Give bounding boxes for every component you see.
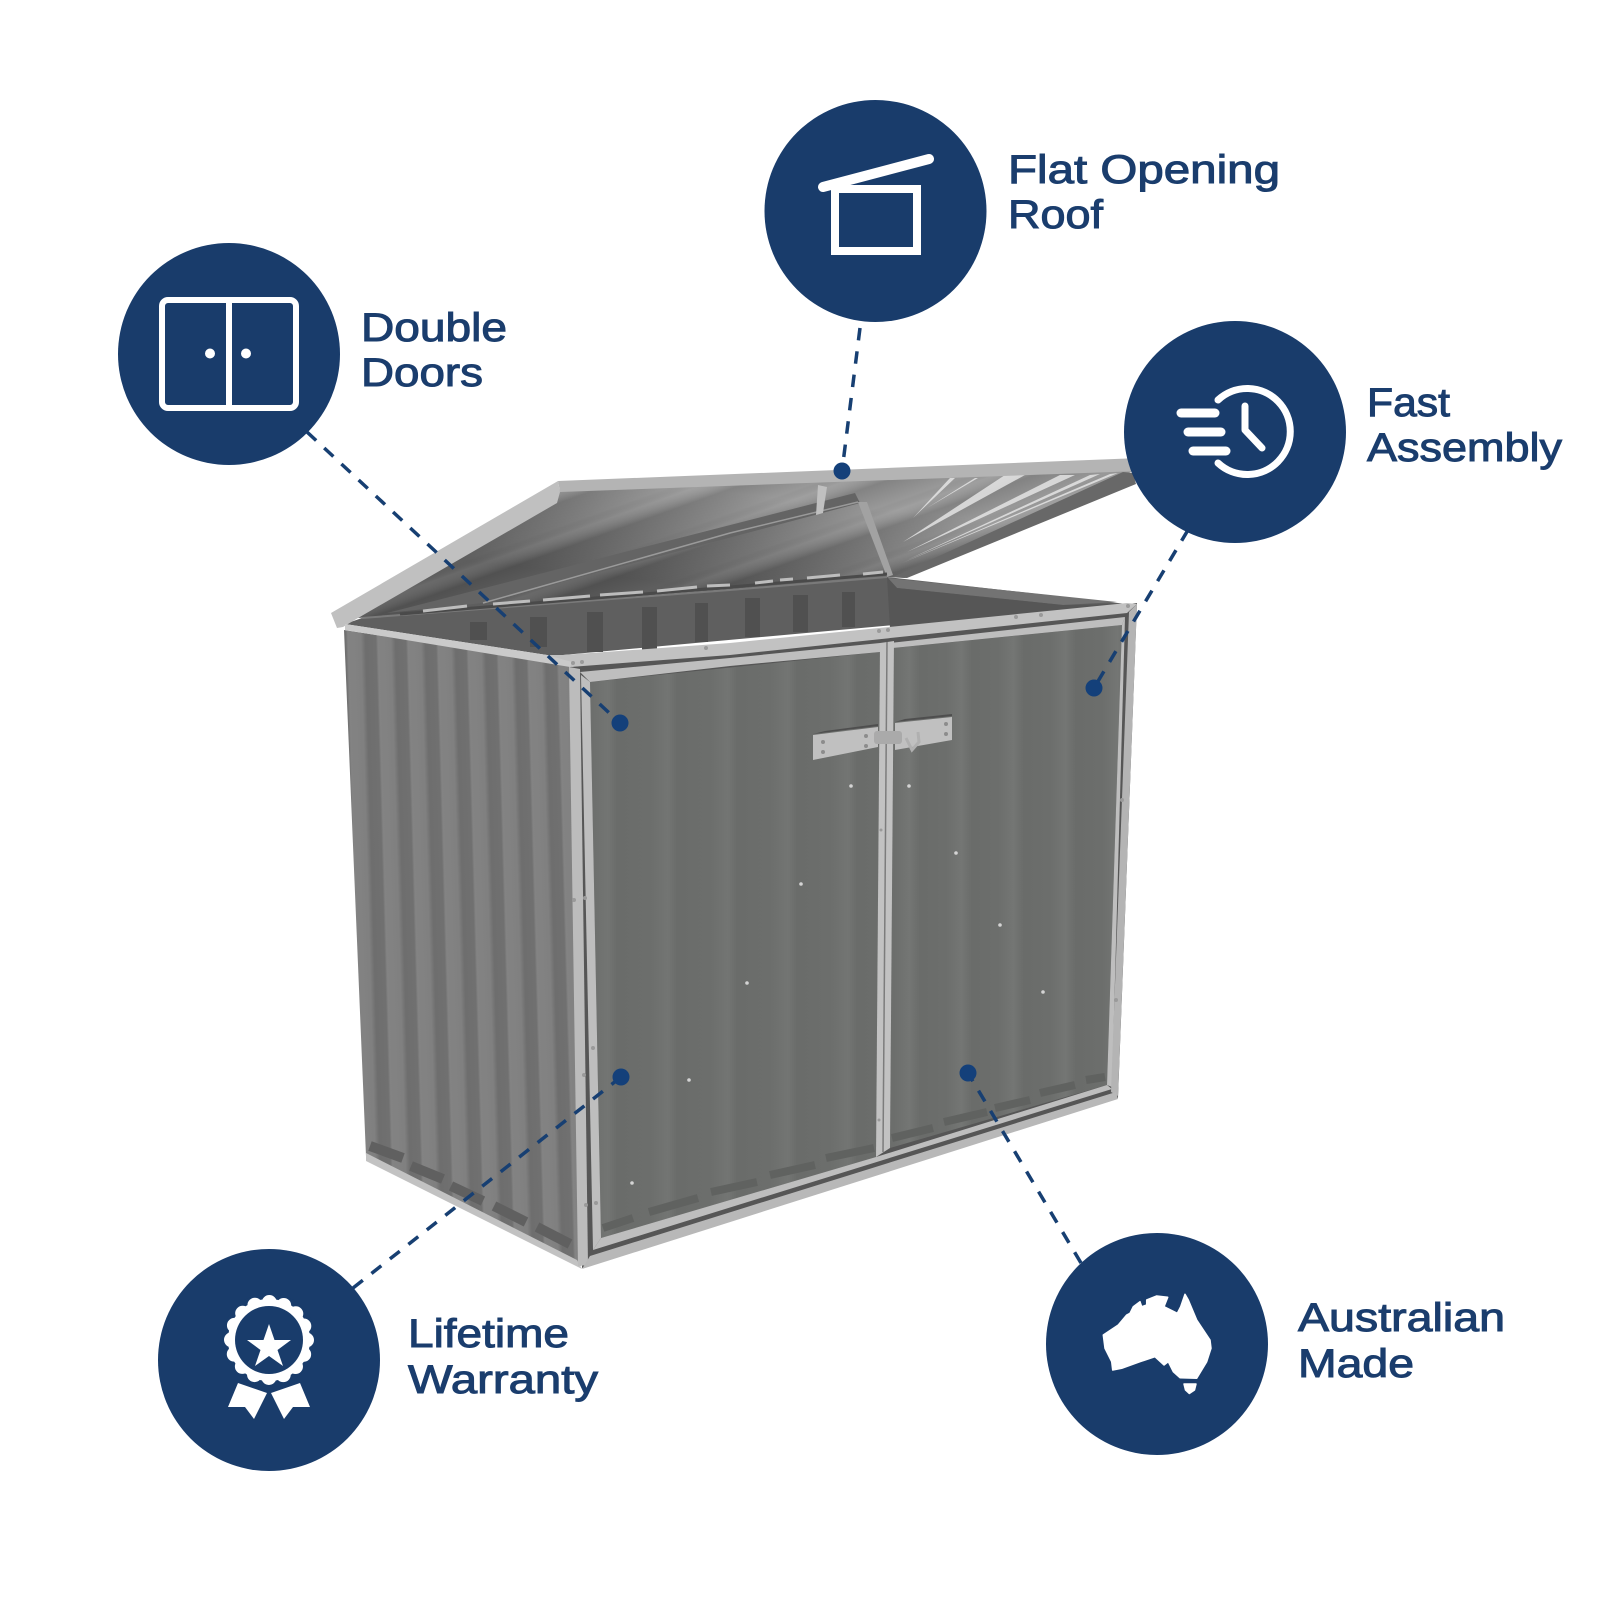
side panel [344, 630, 581, 1266]
label: flat opening roof: Flat Opening [1008, 148, 1280, 192]
lid stay bar [858, 502, 893, 577]
icon: double doors [162, 300, 296, 408]
label: double doors: Doors [361, 351, 483, 395]
dashed connector: lifetime warranty [353, 1077, 621, 1288]
label: fast assembly [1367, 381, 1562, 470]
shed illustration [331, 458, 1140, 1269]
callout: flat opening roof [764, 100, 1280, 322]
label: fast assembly: Fast [1367, 381, 1450, 425]
side base rail [366, 1153, 582, 1269]
label: flat opening roof: Roof [1008, 193, 1104, 237]
right post [1111, 604, 1137, 1096]
label: australian made: Australian [1298, 1296, 1505, 1340]
top left rim [345, 624, 572, 667]
marker dots [612, 462, 1102, 1086]
right door [890, 625, 1122, 1148]
label: flat opening roof [1008, 148, 1280, 237]
callout: fast assembly [1124, 321, 1562, 543]
label: australian made: Made [1298, 1342, 1414, 1386]
label: lifetime warranty: Lifetime [408, 1312, 569, 1356]
icon: australia map [1103, 1294, 1211, 1394]
label: fast assembly: Assembly [1367, 426, 1562, 470]
door rivets [630, 784, 1045, 1185]
icon: open roof box [823, 159, 929, 251]
door frame [580, 617, 1125, 1250]
lid scalloped rail [362, 572, 887, 618]
dashed connector: flat opening roof [842, 328, 860, 471]
callout: australian made [1046, 1233, 1505, 1455]
interior walls [345, 577, 1127, 655]
corner post [569, 667, 588, 1266]
lid left edge [331, 481, 560, 628]
callout: lifetime warranty [158, 1249, 598, 1471]
dashed connector: double doors [307, 432, 620, 723]
frame rivets [571, 604, 1130, 1207]
dashed connector: fast assembly [1094, 530, 1188, 688]
door bottom shadows [603, 1077, 1105, 1228]
latch assembly [813, 714, 952, 760]
callout: double doors [118, 243, 507, 465]
front backing [570, 603, 1137, 1268]
left door [590, 652, 880, 1238]
lid bracket [816, 485, 827, 515]
dashed connector: australian made [968, 1073, 1081, 1263]
lid underside [358, 470, 1136, 618]
icon: fast clock [1181, 388, 1290, 474]
label: double doors: Double [361, 306, 507, 350]
label: australian made [1298, 1296, 1505, 1386]
centre door post [876, 641, 894, 1157]
label: lifetime warranty [408, 1312, 598, 1402]
label: double doors [361, 306, 507, 395]
label: lifetime warranty: Warranty [408, 1358, 598, 1402]
top front rim [547, 603, 1137, 667]
lid inner rail [387, 493, 860, 613]
base rail [582, 1092, 1118, 1269]
icon: award rosette [222, 1293, 316, 1419]
lid top edge [558, 458, 1140, 492]
